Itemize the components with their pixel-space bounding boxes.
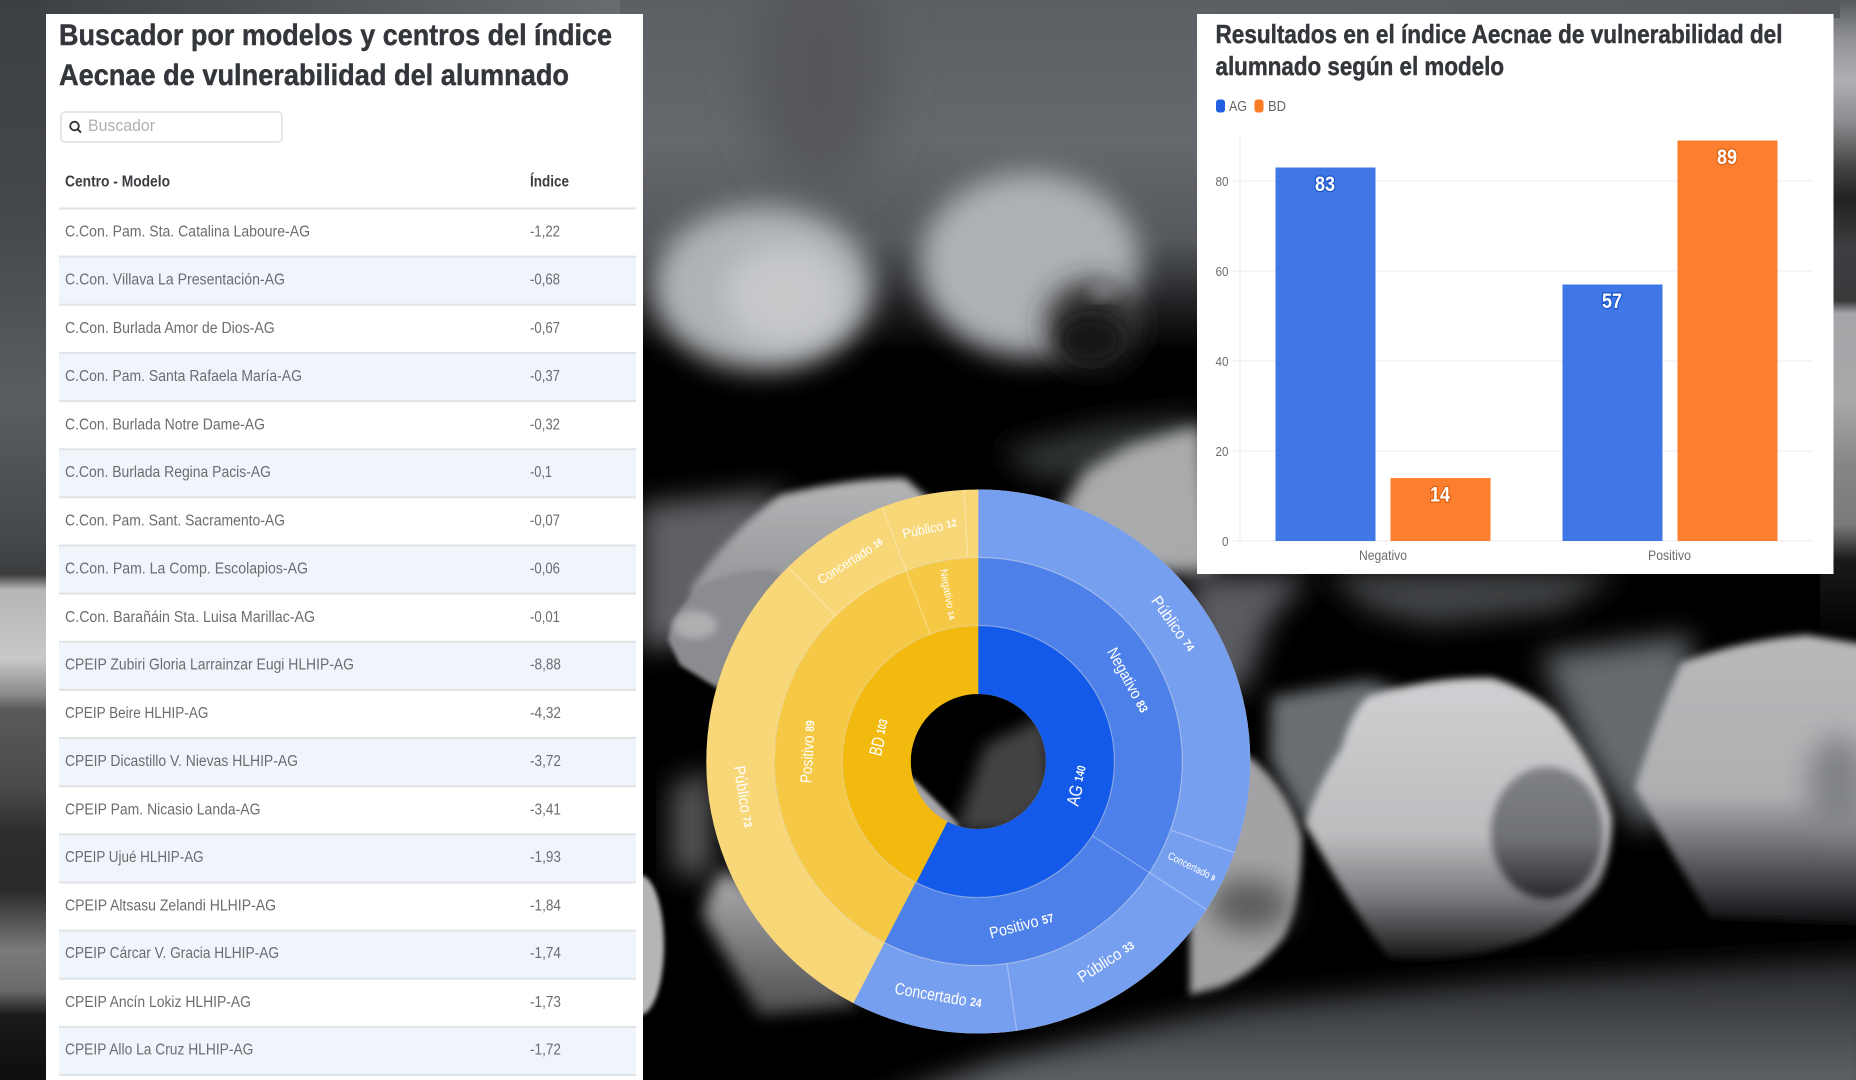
bar: Positivo AG 57 <box>1562 284 1662 541</box>
row 2: -0,68 <box>530 271 560 288</box>
row 18 <box>59 1027 636 1075</box>
label Público 33: Público 33 <box>1075 938 1138 986</box>
row 7 <box>59 497 636 530</box>
bar: Positivo AG 57: 57 <box>1602 290 1622 313</box>
row 8: C.Con. Pam. La Comp. Escolapios-AG <box>65 561 308 578</box>
legend: BD <box>1268 98 1286 115</box>
row 16: -1,74 <box>530 945 561 962</box>
row 3 <box>59 305 636 337</box>
row 18: CPEIP Allo La Cruz HLHIP-AG <box>65 1041 253 1058</box>
table header: Centro - Modelo <box>65 174 170 191</box>
panel: search table <box>46 14 643 1080</box>
row 1: -1,22 <box>530 224 560 241</box>
label AG 140: AG 140 <box>1063 763 1092 808</box>
row 15 <box>59 882 636 915</box>
row 7: C.Con. Pam. Sant. Sacramento-AG <box>65 512 285 530</box>
y axis labels: 40 <box>1216 354 1228 369</box>
y axis labels <box>1216 174 1228 549</box>
row 6 <box>59 449 636 497</box>
x axis labels <box>1359 547 1691 563</box>
table rows <box>59 224 636 1075</box>
bar: Negativo AG 83: 83 <box>1315 173 1335 196</box>
row 14 <box>59 834 636 882</box>
row 10 <box>59 642 636 690</box>
y axis labels: 60 <box>1216 264 1228 279</box>
x axis labels: Negativo <box>1359 547 1407 563</box>
bar: Positivo BD 89: 89 <box>1717 146 1737 169</box>
search box <box>61 112 282 142</box>
row 12: -3,72 <box>530 753 561 770</box>
label Negativo 14: Negativo 14 <box>937 568 958 621</box>
chart title: alumnado según el modelo <box>1216 51 1504 81</box>
row 3: C.Con. Burlada Amor de Dios-AG <box>65 320 275 337</box>
panel: bar chart <box>1197 14 1834 574</box>
segment separators <box>774 490 1235 1031</box>
row 12: CPEIP Dicastillo V. Nievas HLHIP-AG <box>65 753 298 770</box>
row 14: -1,93 <box>530 849 561 866</box>
search box: Buscador <box>88 116 155 135</box>
row 11 <box>59 690 636 722</box>
row 4 <box>59 353 636 401</box>
row 3: -0,67 <box>530 320 560 337</box>
ring 1: AG and BD <box>877 660 1080 863</box>
row 17: CPEIP Ancín Lokiz HLHIP-AG <box>65 994 251 1011</box>
row 6: C.Con. Burlada Regina Pacis-AG <box>65 464 271 481</box>
bar: Negativo BD 14: 14 <box>1430 484 1450 506</box>
legend: AG <box>1229 98 1247 115</box>
row 8: -0,06 <box>530 561 560 578</box>
ring 3: Público and Concertado <box>740 523 1216 1000</box>
label Concertado 9: Concertado 9 <box>1166 850 1218 884</box>
label Público 12: Público 12 <box>901 515 958 541</box>
row 11: -4,32 <box>530 705 561 722</box>
bar: Negativo AG 83 <box>1276 168 1376 541</box>
row 5: -0,32 <box>530 416 560 433</box>
row 4: -0,37 <box>530 368 560 385</box>
row 9 <box>59 594 636 626</box>
table title: Aecnae de vulnerabilidad del alumnado <box>59 59 569 92</box>
row 15: -1,84 <box>530 898 561 915</box>
bar: Negativo BD 14 <box>1390 478 1490 541</box>
y axis labels: 20 <box>1216 444 1228 459</box>
row 5 <box>59 401 636 433</box>
row 18: -1,72 <box>530 1041 561 1058</box>
row 2: C.Con. Villava La Presentación-AG <box>65 271 285 288</box>
row 1: C.Con. Pam. Sta. Catalina Laboure-AG <box>65 224 310 241</box>
row 16 <box>59 931 636 979</box>
y axis labels: 80 <box>1216 174 1228 189</box>
row 17 <box>59 979 636 1011</box>
row 4: C.Con. Pam. Santa Rafaela María-AG <box>65 368 302 385</box>
chart title <box>1216 19 1782 81</box>
row 12 <box>59 738 636 786</box>
row 11: CPEIP Beire HLHIP-AG <box>65 705 208 722</box>
row 9: -0,01 <box>530 609 560 626</box>
row 10: CPEIP Zubiri Gloria Larrainzar Eugi HLHIP-AG <box>65 657 354 674</box>
label Positivo 89: Positivo 89 <box>798 720 819 784</box>
chart gridlines and y axis <box>1232 137 1812 541</box>
row 13: CPEIP Pam. Nicasio Landa-AG <box>65 801 260 818</box>
label Concertado 24: Concertado 24 <box>893 980 983 1012</box>
row 10: -8,88 <box>530 657 561 674</box>
x axis labels: Positivo <box>1648 547 1691 563</box>
label Concertado 16: Concertado 16 <box>815 534 886 587</box>
table header <box>59 174 636 208</box>
bar: Positivo BD 89 <box>1678 140 1778 541</box>
row 16: CPEIP Cárcar V. Gracia HLHIP-AG <box>65 945 279 962</box>
row 8 <box>59 546 636 594</box>
sunburst chart <box>730 490 1235 1031</box>
legend <box>1216 98 1286 115</box>
row 7: -0,07 <box>530 512 560 530</box>
row 15: CPEIP Altsasu Zelandi HLHIP-AG <box>65 898 276 915</box>
label Público 74: Público 74 <box>1147 593 1199 656</box>
row 14: CPEIP Ujué HLHIP-AG <box>65 849 204 866</box>
ring 2: Negativo and Positivo <box>808 591 1148 932</box>
label Público 73: Público 73 <box>730 765 756 829</box>
y axis labels: 0 <box>1222 534 1228 549</box>
row 6: -0,1 <box>530 464 552 481</box>
label Negativo 83: Negativo 83 <box>1103 645 1152 716</box>
table title <box>59 19 612 92</box>
table header: Índice <box>530 174 569 191</box>
row 1 <box>65 224 560 241</box>
row 9: C.Con. Barañáin Sta. Luisa Marillac-AG <box>65 609 315 626</box>
row 5: C.Con. Burlada Notre Dame-AG <box>65 416 265 433</box>
row 13: -3,41 <box>530 801 561 818</box>
row 17: -1,73 <box>530 994 561 1011</box>
sunburst labels <box>730 515 1218 1012</box>
table title: Buscador por modelos y centros del índice <box>59 19 612 52</box>
label BD 103: BD 103 <box>865 717 894 758</box>
label Positivo 57: Positivo 57 <box>988 909 1056 943</box>
chart title: Resultados en el índice Aecnae de vulnerabilidad del <box>1216 19 1782 49</box>
row 2 <box>59 257 636 305</box>
row 13 <box>59 786 636 818</box>
